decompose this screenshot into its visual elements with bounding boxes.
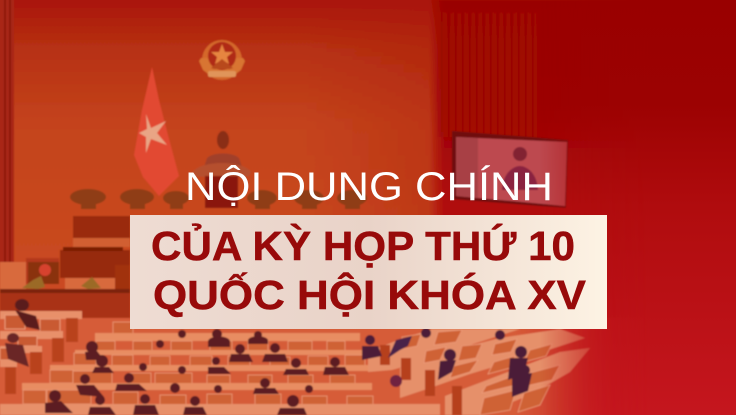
- background: right red panel: [428, 0, 629, 318]
- right side red fade over the hall: [540, 0, 736, 415]
- striped wall panel: [437, 12, 537, 137]
- national emblem: [199, 40, 245, 80]
- podium: [0, 216, 130, 320]
- Ho Chi Minh bust: [193, 131, 251, 208]
- delegate desks: right block: [362, 328, 590, 415]
- potted plants row: [70, 189, 367, 209]
- title line 1: CỦA KỲ HỌP THỨ 10: [151, 223, 575, 269]
- video screen: [452, 131, 568, 208]
- floor of the hall: [0, 318, 736, 415]
- delegates seated: centre rows: [45, 329, 349, 415]
- title box: [130, 215, 607, 329]
- Vietnamese flag: [134, 67, 179, 196]
- title line 2: QUỐC HỘI KHÓA XV: [153, 272, 587, 318]
- curtain at left: [0, 0, 14, 262]
- heading: NỘI DUNG CHÍNH: NỘI DUNG CHÍNH: [185, 164, 553, 209]
- background: wall darkening to the right: [300, 0, 440, 315]
- title box background: [130, 215, 607, 329]
- delegate desks: centre rows: [0, 322, 440, 415]
- delegate desks: left block: [0, 299, 82, 394]
